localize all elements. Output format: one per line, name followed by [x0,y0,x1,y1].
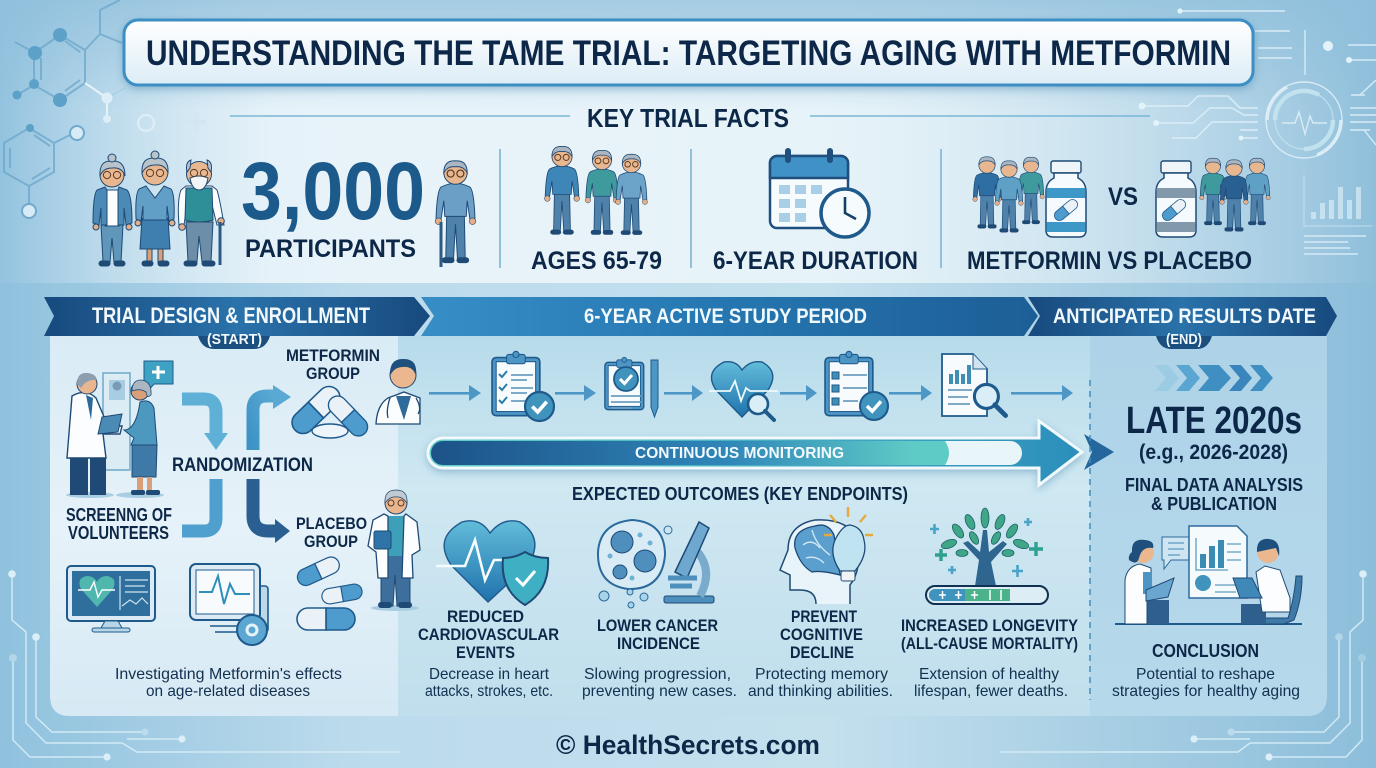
caption: investigating metformin [115,666,342,700]
description: attacks, strokes, etc. [425,683,553,700]
date [1126,400,1302,464]
icon: metformin capsules [287,382,371,440]
vs: VS [1108,183,1138,211]
number: 3,000 [241,146,425,237]
label: screening [66,505,172,543]
label: placebo group: GROUP [304,532,358,551]
arrow: continuous monitoring [428,421,1114,485]
section: key trial facts [93,103,1270,275]
description [425,666,553,700]
outcome: cancer [582,520,737,700]
label: COGNITIVE [780,625,863,644]
timeline banner [44,297,1337,349]
title [124,20,1253,85]
timeline arrows [429,385,1073,401]
icon: cell and microscope [598,520,714,608]
conclusion: strategies for healthy aging [1112,683,1300,700]
label: DECLINE [790,643,854,662]
banner: enrollment: (START) [207,331,262,348]
conclusion: CONCLUSION [1152,641,1259,661]
icon: progress chevrons [1155,365,1273,391]
banner: enrollment: TRIAL DESIGN & ENROLLMENT [92,303,370,328]
label: INCREASED LONGEVITY [901,616,1079,635]
banner: active study period [421,297,1038,336]
label: final data analysis: & PUBLICATION [1151,494,1277,514]
label: metformin group: GROUP [306,364,360,383]
icon: older man with cane [435,161,476,267]
icon: head with brain and bulb [780,507,873,604]
icon: report with magnifier [942,354,1006,416]
label [780,607,863,662]
icon: checklist clipboard [492,351,554,421]
banner: anticipated results date: (END) [1166,331,1202,348]
conclusion [1112,641,1300,700]
label [597,616,718,653]
icon: clipboard with pencil [605,357,658,417]
label [418,607,559,662]
icon: calendar and clock [770,148,869,237]
date: LATE 2020s [1126,400,1302,442]
label: CARDIOVASCULAR [418,625,559,644]
icon: heart and shield [436,521,548,605]
label: randomization: RANDOMIZATION [172,455,313,476]
banner: anticipated results date [1028,297,1337,349]
label: placebo group: PLACEBO [296,514,367,533]
description [582,666,737,700]
banner: anticipated results date: ANTICIPATED RESULTS DATE [1053,305,1316,328]
label: (ALL-CAUSE MORTALITY) [901,634,1078,653]
outcome: cognitive [748,507,893,700]
description: Extension of healthy [919,666,1059,683]
icon: placebo bottle and group [1156,158,1270,237]
icon: heart with magnifier [709,362,778,420]
outcome: longevity [901,508,1079,700]
icon: heart monitor [67,566,155,632]
outcome: cardiovascular [418,521,559,700]
panel: main content background [50,336,1327,716]
icon: screening of volunteers [66,361,173,498]
label: 6-YEAR DURATION [713,247,918,275]
fact: metformin vs placebo [967,157,1270,275]
icon: researchers reviewing report [1115,526,1302,624]
description: Slowing progression, [584,666,731,683]
label: screening: SCREENNG OF [66,505,172,525]
icon: vital-signs report [190,564,268,645]
fact: ages [531,146,662,275]
description: preventing new cases. [582,683,737,700]
label: EVENTS [456,643,515,662]
label: LOWER CANCER [597,616,718,635]
icon: placebo capsules [295,554,363,630]
conclusion: Potential to reshape [1136,666,1275,683]
label: placebo group [296,514,367,551]
label: final data analysis: FINAL DATA ANALYSIS [1125,475,1303,495]
label: PREVENT [791,607,858,626]
icon: checkbox clipboard [825,351,888,420]
fact: participants [93,146,476,267]
description [748,666,893,700]
icon: three seniors [544,146,648,235]
arrow: continuous monitoring: CONTINUOUS MONITORING [635,445,844,462]
description: and thinking abilities. [748,683,893,700]
label: INCIDENCE [617,634,700,653]
caption: investigating metformin: on age-related diseases [146,683,310,700]
heading: expected outcomes: EXPECTED OUTCOMES (KEY ENDPOINTS) [572,484,908,504]
footer: © HealthSecrets.com [556,730,820,760]
panel: active study period [418,351,1114,700]
icon: doctor bust [376,359,420,424]
description: lifespan, fewer deaths. [914,683,1068,700]
label: final data analysis [1125,475,1303,514]
panel: trial design and enrollment [66,346,420,700]
label: metformin group [286,346,380,383]
icon: tree and progress bar [926,508,1048,604]
heading: key trial facts: KEY TRIAL FACTS [587,103,789,133]
label: metformin group: METFORMIN [286,346,380,365]
label: AGES 65-79 [531,247,662,275]
icon: three older adults [93,151,224,266]
fact: duration [713,148,918,275]
banner: active study period: 6-YEAR ACTIVE STUDY PERIOD [584,305,867,328]
icon: metformin group and bottle [973,157,1086,237]
label: METFORMIN VS PLACEBO [967,247,1252,275]
description [914,666,1068,700]
icon: placebo doctor [368,490,420,611]
description: Decrease in heart [429,666,550,683]
label: PARTICIPANTS [245,235,416,263]
description: Protecting memory [755,666,888,683]
caption: investigating metformin: Investigating Metformin's effects [115,666,342,683]
label: REDUCED [447,607,524,626]
label: screening: VOLUNTEERS [68,523,169,543]
panel: anticipated results [1112,365,1303,700]
label [901,616,1079,653]
flow arrows: randomization [182,385,291,543]
date: (e.g., 2026-2028) [1139,441,1288,464]
banner: enrollment [44,297,430,349]
